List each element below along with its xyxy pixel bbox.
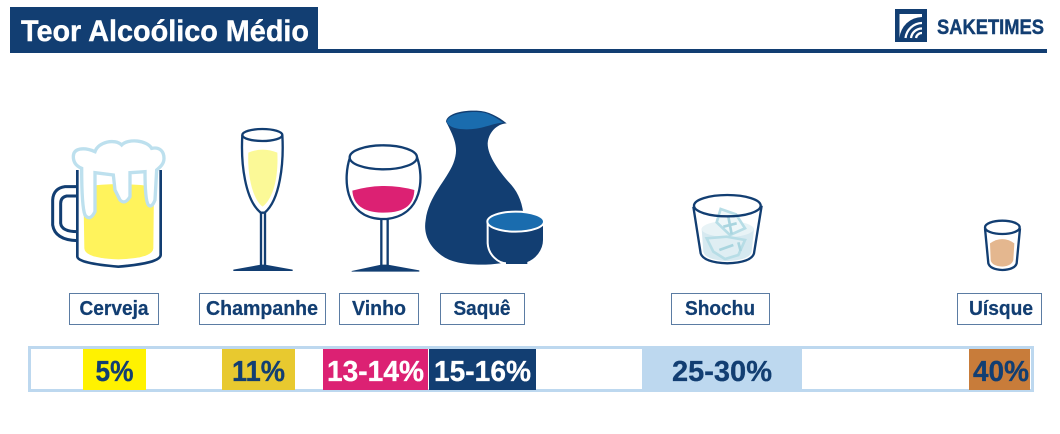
label: Cerveja — [70, 294, 158, 324]
segment: 13-14%: 13-14% — [327, 356, 424, 388]
label: Champanhe: Champanhe — [206, 298, 318, 320]
segment: 11%: 11% — [232, 356, 285, 388]
label: Champanhe — [200, 294, 326, 324]
icon: beer mug — [53, 141, 164, 267]
label: Vinho — [340, 294, 418, 324]
icon: champagne flute — [233, 129, 293, 271]
segment: 11% — [222, 349, 295, 390]
label: Shochu — [672, 294, 770, 324]
segment: 40%: 40% — [973, 356, 1029, 388]
label: Uísque: Uísque — [969, 298, 1033, 320]
icon: sake bottle and cup — [425, 111, 544, 265]
label: Saquê: Saquê — [454, 298, 510, 320]
label: Saquê — [440, 294, 524, 324]
segment: 5% — [83, 349, 146, 390]
icon: whisky glass — [985, 221, 1020, 270]
logo: SAKETIMES: SAKETIMES — [937, 16, 1044, 39]
icon: wine glass — [347, 145, 420, 272]
label: Vinho: Vinho — [352, 298, 406, 320]
icon: shochu glass with ice — [693, 195, 762, 263]
label: Uísque — [958, 294, 1042, 324]
segment: 15-16%: 15-16% — [434, 356, 531, 388]
title: Teor Alcoólico Médio — [21, 15, 309, 48]
logo: SAKETIMES — [895, 9, 1044, 42]
segment: 25-30% — [642, 347, 802, 391]
label: Shochu: Shochu — [685, 298, 755, 320]
alcohol percentage scale bar — [30, 347, 1032, 391]
label: Cerveja: Cerveja — [80, 298, 149, 320]
title — [10, 7, 318, 53]
segment: 5%: 5% — [96, 356, 134, 388]
segment: 25-30%: 25-30% — [672, 356, 772, 388]
